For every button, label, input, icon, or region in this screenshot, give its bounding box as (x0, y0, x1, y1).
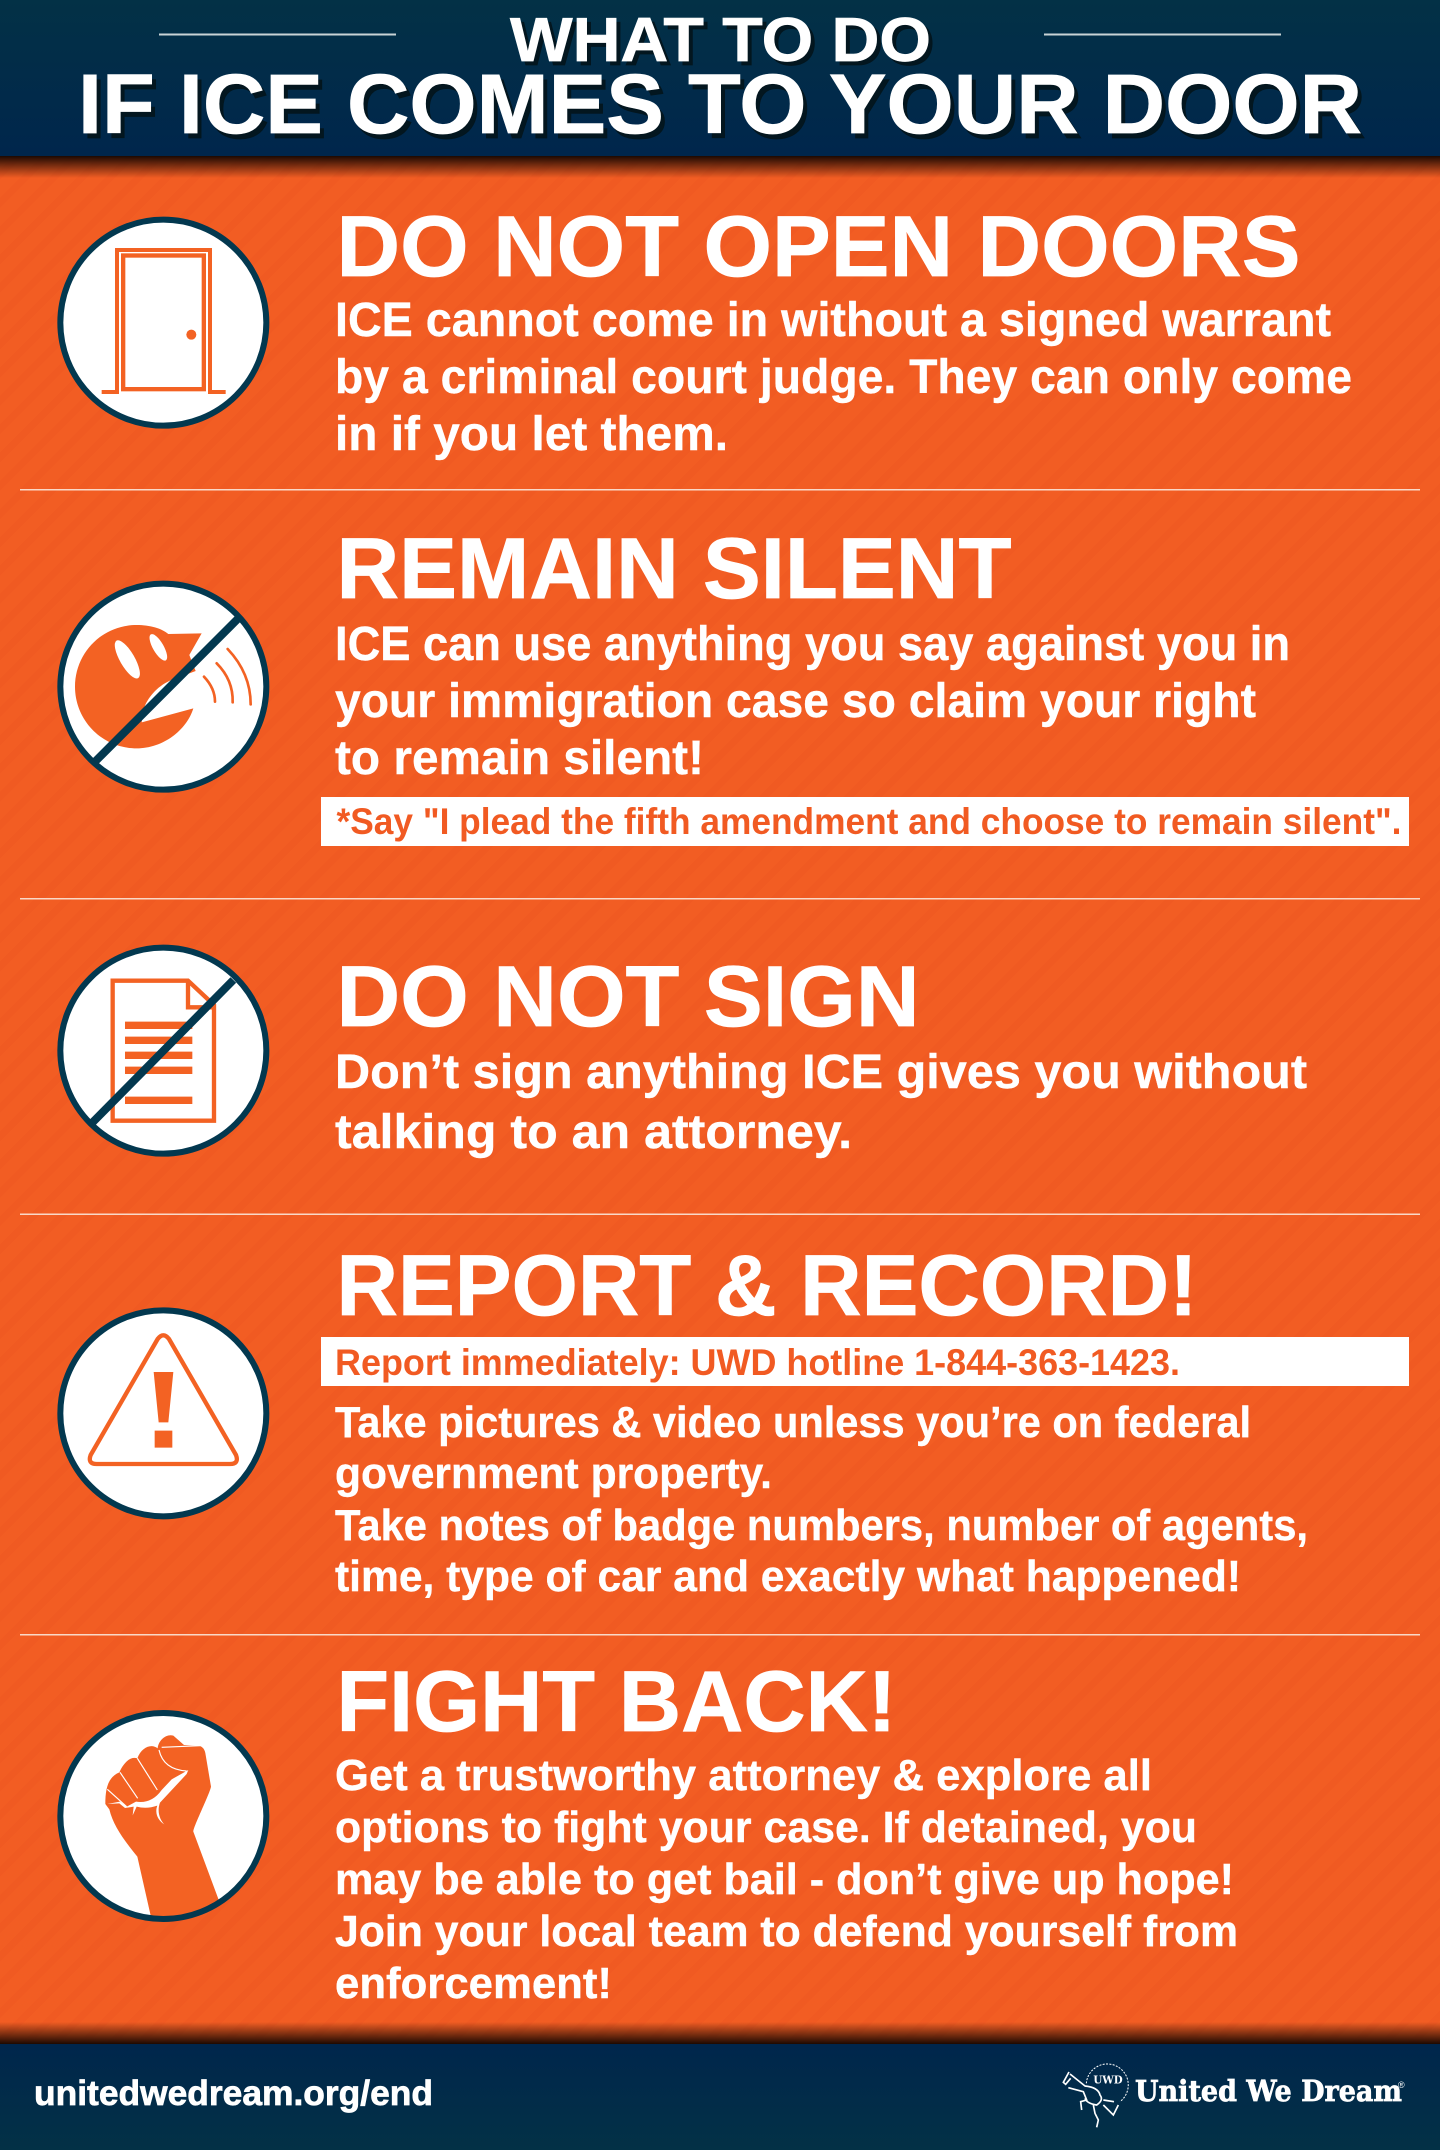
icon: silenced mouth (60, 584, 266, 790)
heading: do not sign: DO NOT SIGN (336, 949, 920, 1045)
divider 4 (20, 1634, 1420, 1636)
title: if ice comes to your door: IF ICE COMES TO YOUR DOOR (82, 62, 1366, 156)
text: take pictures and notes: government property. (335, 1449, 772, 1498)
heading: fight back: FIGHT BACK! (336, 1654, 896, 1750)
text: fight your case: enforcement! (335, 1959, 612, 2008)
header band (0, 0, 1440, 178)
text: silence explanation: to remain silent! (335, 732, 704, 785)
title: what to do: WHAT TO DO (514, 10, 935, 79)
icon: uwd figure (1063, 2064, 1128, 2127)
text: attorney advice: talking to an attorney. (335, 1106, 852, 1159)
panel: do not open doors (60, 199, 1352, 461)
logo: united we dream (1063, 2064, 1405, 2127)
text: fight your case: may be able to get bail - don’t give up hope! (335, 1855, 1234, 1904)
text: silence explanation: your immigration case so claim your right (335, 675, 1256, 728)
footer band (0, 2022, 1440, 2150)
heading: report and record: REPORT & RECORD! (336, 1238, 1198, 1334)
icon: uwd figure: UWD (1093, 2072, 1123, 2086)
text: silence explanation (335, 618, 1290, 785)
text: fight your case (335, 1751, 1238, 2008)
text: take pictures and notes (335, 1398, 1308, 1601)
heading: do not open doors: DO NOT OPEN DOORS (336, 199, 1300, 295)
title: what to do: WHAT TO DO (510, 6, 931, 75)
panel: report and record (60, 1238, 1409, 1601)
divider 2 (20, 898, 1420, 900)
panel: fight back (60, 1654, 1238, 2008)
text: attorney advice: Don’t sign anything ICE gives you without (335, 1046, 1307, 1099)
panel: do not sign (60, 948, 1307, 1159)
icon: door (60, 220, 266, 426)
text: door warrant explanation: in if you let them. (335, 408, 728, 461)
text: fight your case: Join your local team to defend yourself from (335, 1907, 1238, 1956)
text: attorney advice (335, 1046, 1307, 1159)
callout: hotline: Report immediately: UWD hotline 1-844-363-1423. (335, 1342, 1180, 1383)
icon: raised fist (60, 1713, 266, 1923)
text: fight your case: options to fight your case. If detained, you (335, 1803, 1197, 1852)
divider 1 (20, 489, 1420, 490)
registered mark: ® (1398, 2080, 1405, 2090)
callout: say i plead the fifth: *Say "I plead the fifth amendment and choose to remain silent". (336, 801, 1402, 842)
text: take pictures and notes: time, type of car and exactly what happened! (335, 1552, 1241, 1601)
heading: remain silent: REMAIN SILENT (336, 521, 1011, 617)
text: door warrant explanation: ICE cannot come in without a signed warrant (335, 294, 1331, 347)
text: take pictures and notes: Take pictures & video unless you’re on federal (335, 1398, 1251, 1447)
icon: crossed out document (60, 948, 266, 1154)
logo wordmark: United We Dream (1135, 2074, 1402, 2108)
text: take pictures and notes: Take notes of badge numbers, number of agents, (335, 1501, 1308, 1550)
text: door warrant explanation (335, 294, 1352, 461)
title: if ice comes to your door: IF ICE COMES TO YOUR DOOR (78, 57, 1362, 151)
icon: warning triangle (60, 1310, 266, 1516)
footer url: unitedwedream.org/end (34, 2074, 433, 2113)
callout: hotline (321, 1337, 1409, 1386)
text: silence explanation: ICE can use anything you say against you in (335, 618, 1290, 671)
text: fight your case: Get a trustworthy attorney & explore all (335, 1751, 1152, 1800)
text: door warrant explanation: by a criminal court judge. They can only come (335, 351, 1352, 404)
panel: remain silent (60, 521, 1409, 846)
divider 3 (20, 1214, 1420, 1215)
